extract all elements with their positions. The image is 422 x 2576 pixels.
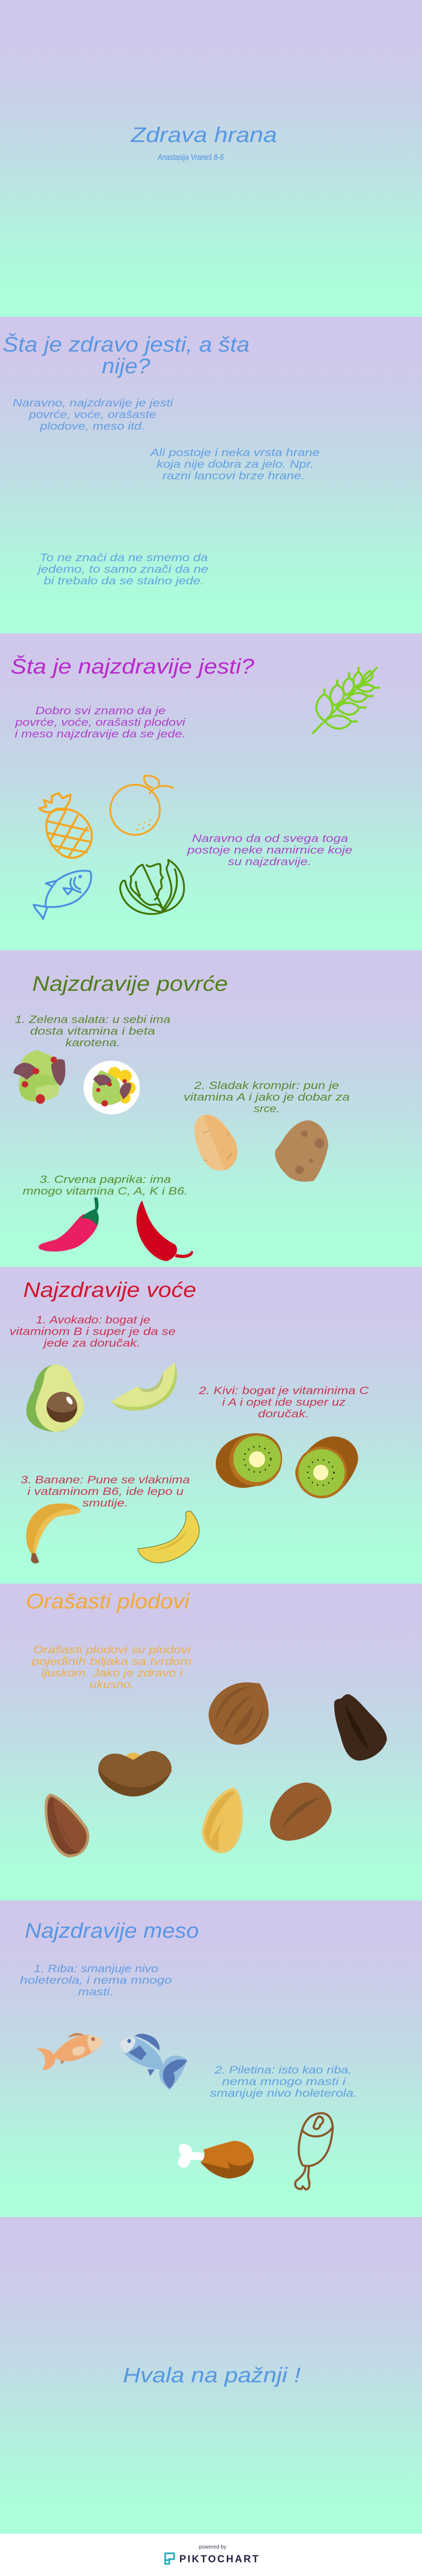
text block: unhealthy foods: Ali postoje i neka vrsta hrane	[149, 447, 320, 459]
text block: healthy foods: Naravno, najzdravije je jesti	[13, 397, 174, 409]
icon: lettuce	[120, 860, 184, 914]
text block: moderation: To ne znači da ne smemo da	[40, 552, 208, 564]
text block: sweet potato: srce.	[254, 1103, 280, 1115]
text block: lettuce: karotena.	[65, 1037, 120, 1049]
icon: brown potato	[275, 1120, 328, 1182]
icon: salad on plate	[83, 1060, 140, 1114]
text block: moderation: jedemo, to samo znači da ne	[36, 563, 208, 575]
icon: wheat	[313, 668, 379, 733]
brand name: PIKTOCHART	[179, 2554, 258, 2565]
icon: pale almond	[202, 1787, 243, 1853]
icon: heart-shaped nut	[98, 1751, 171, 1796]
icon: avocado slice	[111, 1362, 177, 1410]
panel: healthiest vegetables	[0, 950, 422, 1267]
icon: banana left	[26, 1503, 81, 1564]
text block: banana: 3. Banane: Pune se vlaknima	[21, 1474, 190, 1486]
text block: chicken: 2. Piletina: isto kao riba,	[214, 2064, 352, 2076]
text block: healthiest groceries: su najzdravije.	[228, 856, 311, 868]
text block: chicken	[210, 2064, 357, 2099]
text block: nuts description: ljuskom. Jako je zdravo i	[42, 1667, 184, 1679]
icon: dark seed	[334, 1694, 387, 1760]
text block: fish: 1. Riba: smanjuje nivo	[34, 1963, 158, 1975]
text block: banana: i vataminom B6, ide lepo u	[27, 1485, 184, 1498]
text block: banana	[21, 1474, 190, 1509]
text block: fish	[20, 1963, 172, 1998]
text block: intro: i meso najzdravije da se jede.	[15, 728, 186, 740]
text block: avocado	[9, 1314, 176, 1349]
text block: unhealthy foods: razni lancovi brze hrane.	[162, 470, 305, 482]
icon: banana right	[138, 1511, 199, 1563]
text block: chicken: smanjuje nivo holeterola.	[210, 2087, 357, 2099]
heading: Najzdravije voće	[23, 1278, 196, 1302]
text block: fish: holeterola, i nema mnogo	[20, 1974, 172, 1986]
icon: kiwi right	[295, 1436, 358, 1498]
icon: drumstick outline	[295, 2113, 333, 2190]
icon: pale potato	[194, 1114, 237, 1170]
text block: unhealthy foods	[149, 447, 320, 482]
text block: fish: masti.	[78, 1986, 113, 1998]
text block: kiwi: 2. Kivi: bogat je vitaminima C	[198, 1385, 369, 1397]
text block: lettuce	[15, 1014, 170, 1049]
text block: intro	[15, 705, 186, 740]
text block: red pepper	[23, 1173, 188, 1197]
icon: avocado half	[26, 1365, 84, 1432]
text block: moderation	[36, 552, 208, 587]
text block: moderation: bi trebalo da se stalno jede.	[44, 575, 204, 587]
heading: Orašasti plodovi	[26, 1590, 190, 1613]
icon: chicken drumstick	[178, 2141, 254, 2179]
text block: healthiest groceries: postoje neke namirnice koje	[187, 844, 352, 856]
text block: nuts description	[31, 1644, 191, 1691]
text block: lettuce: 1. Zelena salata: u sebi ima	[15, 1014, 170, 1026]
text block: healthy foods	[13, 397, 174, 432]
text block: sweet potato	[184, 1079, 350, 1115]
panel: title	[0, 0, 422, 317]
text block: banana: smutije.	[82, 1497, 128, 1509]
powered by label: powered by	[199, 2544, 227, 2550]
text block: healthiest groceries: Naravno da od svega toga	[192, 832, 348, 845]
text block: nuts description: ukusno.	[90, 1679, 134, 1691]
text block: avocado: 1. Avokado: bogat je	[36, 1314, 150, 1326]
icon: salad	[14, 1050, 65, 1104]
icon: fish outline	[34, 871, 91, 919]
panel: what is healthiest to eat	[0, 633, 422, 950]
heading: nije?	[102, 355, 151, 378]
icon: blue fish	[120, 2034, 187, 2090]
text block: avocado: jede za doručak.	[42, 1337, 140, 1349]
closing message: Hvala na pažnji !	[123, 2364, 301, 2387]
icon: pink chili	[39, 1198, 99, 1252]
icon: brown bean	[270, 1783, 332, 1841]
text block: chicken: nema mnogo masti i	[222, 2076, 347, 2088]
panel: what is healthy to eat	[0, 317, 422, 633]
text block: healthiest groceries	[187, 832, 352, 868]
text block: kiwi	[198, 1385, 369, 1420]
heading: Šta je najzdravije jesti?	[11, 655, 255, 678]
text block: kiwi: i A i opet ide super uz	[222, 1396, 346, 1408]
text block: nuts description: pojedinih biljaka sa tvrdom	[31, 1655, 191, 1668]
text block: healthy foods: povrće, voće, orašaste	[28, 409, 156, 421]
footer: powered by Piktochart	[0, 2534, 422, 2576]
text block: red pepper: mnogo vitamina C, A, K i B6.	[23, 1185, 188, 1197]
text block: sweet potato: 2. Sladak krompir: pun je	[194, 1079, 339, 1092]
text block: lettuce: dosta vitamina i beta	[30, 1025, 155, 1037]
text block: unhealthy foods: koja nije dobra za jelo. Npr.	[157, 458, 314, 470]
text block: avocado: vitaminom B i super je da se	[9, 1325, 176, 1338]
panel: nuts	[0, 1584, 422, 1900]
icon: pineapple	[39, 793, 92, 858]
icon: red chili	[137, 1200, 193, 1261]
icon: Piktochart logo	[165, 2553, 174, 2564]
text block: nuts description: Orašasti plodovi su plodovi	[33, 1644, 191, 1656]
panel: healthiest meat	[0, 1900, 422, 2217]
icon: orange	[110, 775, 173, 835]
author: Anastasija Vraneš 8-6	[157, 153, 224, 162]
text block: intro: Dobro svi znamo da je	[35, 705, 166, 717]
icon: kiwi left	[216, 1433, 282, 1488]
heading: Najzdravije meso	[25, 1919, 199, 1943]
text block: healthy foods: plodove, meso itd.	[40, 420, 145, 432]
icon: orange fish	[36, 2033, 103, 2070]
text block: red pepper: 3. Crvena paprika: ima	[40, 1173, 171, 1186]
icon: striped seed	[45, 1794, 89, 1858]
text block: kiwi: doručak.	[258, 1408, 309, 1420]
panel: healthiest fruit	[0, 1267, 422, 1584]
panel: thank you	[0, 2217, 422, 2534]
heading: Najzdravije povrće	[32, 972, 228, 996]
heading: Šta je zdravo jesti, a šta	[3, 333, 250, 356]
text block: intro: povrće, voće, orašasti plodovi	[15, 716, 186, 728]
icon: almond	[208, 1682, 268, 1745]
heading	[3, 333, 250, 378]
text block: sweet potato: vitamina A i jako je dobar za	[184, 1091, 350, 1103]
title: Zdrava hrana	[130, 124, 277, 147]
